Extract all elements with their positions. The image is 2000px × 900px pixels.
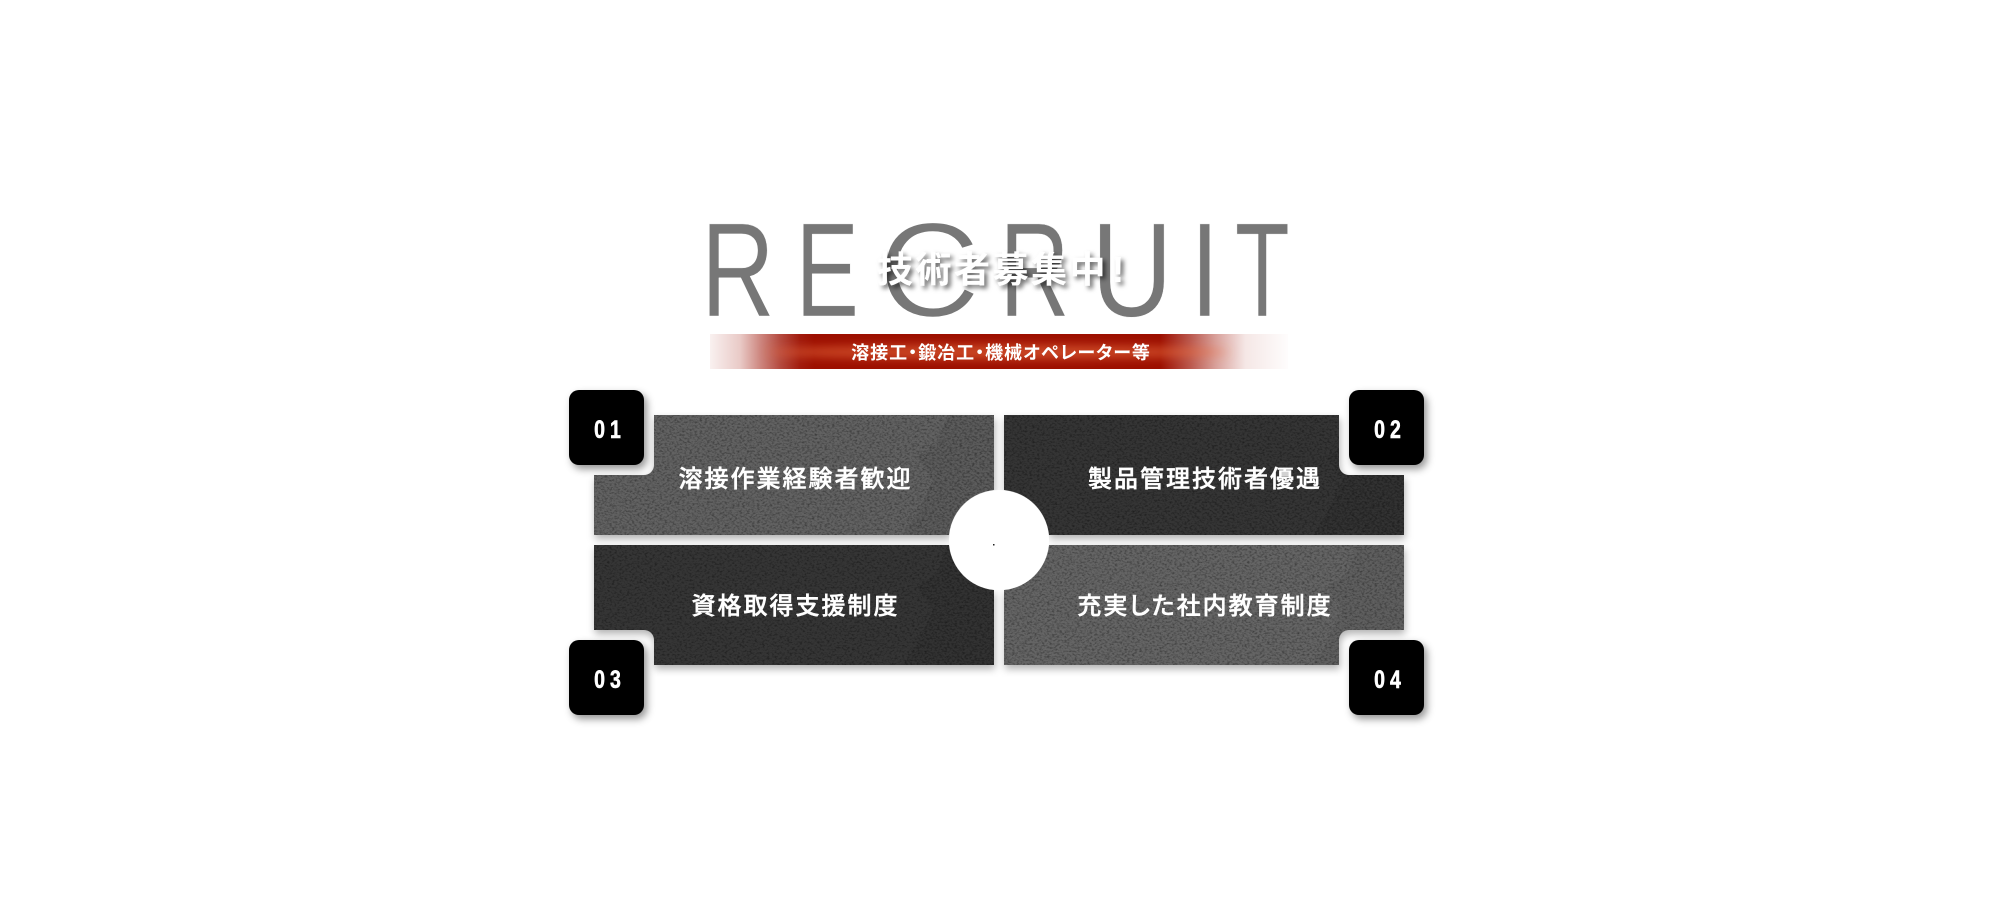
subtitle banner	[710, 334, 1288, 369]
title: RECRUIT: R	[701, 196, 775, 345]
title: RECRUIT: C	[878, 195, 981, 346]
subtitle banner: 溶接工・鍛冶工・機械オペレーター等	[851, 342, 1151, 363]
panel 1 label: 溶接作業経験者歓迎	[678, 466, 912, 493]
title: RECRUIT: E	[796, 195, 859, 345]
panel 4 label: 充実した社内教育制度	[1077, 593, 1333, 620]
heading: engineers wanted: 技術者募集中!	[877, 249, 1127, 290]
badge 03	[569, 640, 644, 715]
title: RECRUIT: R	[999, 195, 1070, 345]
title: RECRUIT: U	[1091, 196, 1173, 345]
badge 03: 03	[594, 666, 626, 694]
badge 01	[569, 390, 644, 465]
center circle	[949, 490, 1049, 590]
badge 04	[1349, 640, 1424, 715]
title: RECRUIT	[701, 195, 1290, 346]
badge 04: 04	[1374, 666, 1406, 694]
panel 2 label: 製品管理技術者優遇	[1088, 466, 1322, 493]
title: RECRUIT: I	[1190, 196, 1219, 345]
panel 1: welding experience welcome	[594, 415, 994, 535]
panel 2: product management engineers preferred	[1004, 415, 1404, 535]
badge 02	[1349, 390, 1424, 465]
panel 3: qualification support system	[594, 545, 994, 665]
title: RECRUIT: T	[1235, 196, 1290, 345]
badge 02: 02	[1374, 416, 1406, 444]
badge 01: 01	[594, 416, 626, 444]
panel 3 label: 資格取得支援制度	[692, 593, 900, 620]
panel 4: in-house training system	[1004, 545, 1404, 665]
